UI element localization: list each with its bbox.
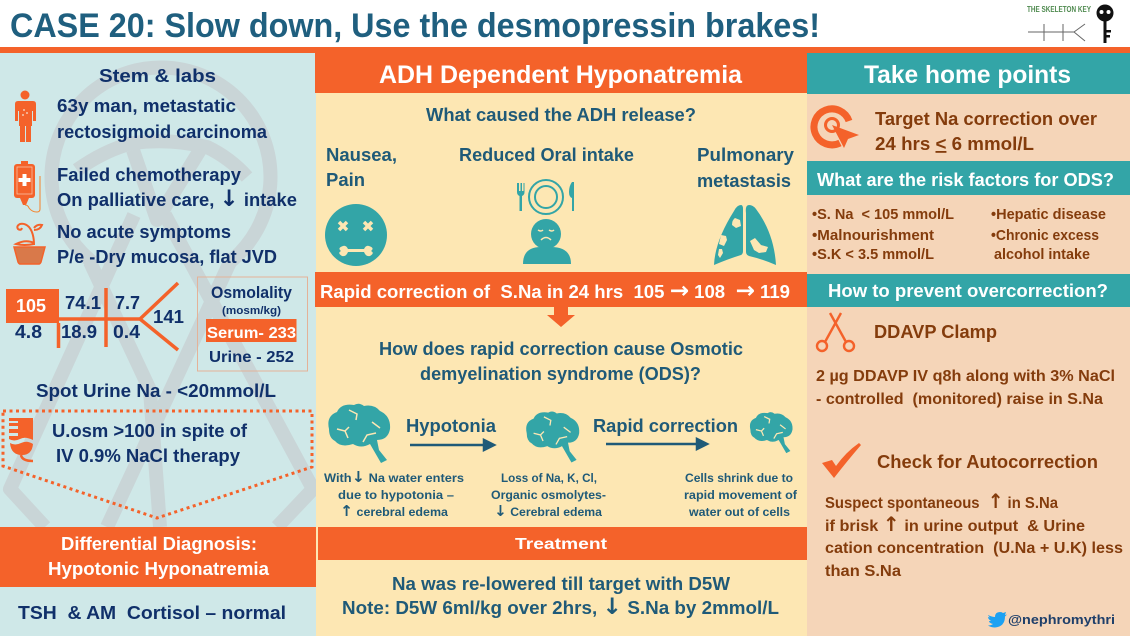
social handle: [988, 612, 1115, 628]
dotted callout: IV 0.9% NaCl therapy: [56, 446, 240, 466]
label: hypotonia: Hypotonia: [406, 416, 497, 436]
text: autocorrection: Suspect spontaneous ↑ in S.Na: [825, 489, 1058, 513]
icon: target: [814, 109, 859, 148]
panel: differential diagnosis: [0, 527, 318, 636]
text: autocorrection: [825, 489, 1123, 580]
caption: rapid correction stage: water out of cells: [688, 505, 790, 519]
icon: clamp: [817, 313, 854, 351]
text: target correction: Target Na correction over: [875, 109, 1097, 129]
icon: shrunken brain: [750, 412, 793, 453]
title: CASE 20: Slow down, Use the desmopressin brakes!: [10, 7, 820, 45]
caption: rapid correction stage: rapid movement of: [684, 488, 798, 502]
cause: nausea and pain: Nausea,: [326, 145, 397, 165]
fishbone labs: 18.9: [61, 322, 97, 342]
text: patient: rectosigmoid carcinoma: [57, 122, 268, 142]
cause: nausea and pain: Pain: [326, 170, 365, 190]
icon: check mark: [822, 443, 861, 478]
band: rapid correction: Rapid correction of S.Na in 24 hrs 105 → 108 → 119: [320, 278, 790, 304]
text: symptoms: P/e -Dry mucosa, flat JVD: [57, 247, 277, 267]
text: autocorrection: than S.Na: [825, 563, 901, 580]
caption: rapid correction stage: [684, 471, 798, 519]
cause: pulmonary metastasis: [697, 145, 794, 265]
text: chemotherapy: Failed chemotherapy: [57, 165, 241, 185]
text: DDAVP regimen: - controlled (monitored) raise in S.Na: [816, 391, 1103, 408]
text: autocorrection: cation concentration (U.Na + U.K) less: [825, 540, 1123, 557]
band: treatment: [318, 527, 807, 560]
list: risk factors left: [812, 206, 954, 263]
orange header rule: [0, 47, 1130, 53]
cause: pulmonary metastasis: Pulmonary: [697, 145, 794, 165]
fishbone labs: 74.1: [65, 293, 101, 313]
icon: patient body: [15, 90, 36, 142]
heading: autocorrection: Check for Autocorrection: [877, 452, 1098, 472]
text: patient: 63y man, metastatic: [57, 96, 236, 116]
list: risk factors right: [991, 206, 1106, 263]
fishbone labs: 4.8: [15, 322, 42, 342]
list: risk factors left: •Malnourishment: [812, 227, 934, 244]
icon: normalised brain: [526, 411, 579, 462]
fishbone labs: 141: [153, 307, 184, 327]
caption: hypotonia stage: With↓ Na water enters: [324, 468, 464, 486]
panel: differential diagnosis: TSH & AM Cortisol – normal: [18, 603, 286, 623]
icon: iv bag: [14, 161, 40, 212]
cause: pulmonary metastasis: metastasis: [697, 171, 791, 191]
heading: stem and labs: Stem & labs: [99, 66, 216, 86]
panel: take home points: Take home points: [864, 61, 1071, 89]
text: DDAVP regimen: 2 µg DDAVP IV q8h along with 3% NaCl: [816, 368, 1115, 385]
logo: the skeleton key: THE SKELETON KEY: [1027, 5, 1092, 14]
band: risk factors: [807, 161, 1130, 195]
list: risk factors right: •Hepatic disease: [991, 206, 1106, 223]
dotted callout: U.osm >100 in spite of: [52, 421, 248, 441]
fishbone labs: 0.4: [113, 322, 140, 342]
question: ODS: How does rapid correction cause Osmotic: [379, 339, 743, 359]
question: ODS: [379, 339, 743, 384]
text: target correction: 24 hrs < 6 mmol/L: [875, 134, 1034, 154]
band: risk factors: What are the risk factors for ODS?: [817, 170, 1114, 190]
cause: nausea and pain: [325, 145, 397, 266]
text: treatment: [342, 574, 779, 620]
logo: the skeleton key: [1027, 4, 1114, 43]
osmolality box: [198, 277, 308, 371]
fishbone labs: 105: [16, 296, 46, 316]
panel: ADH dependent hyponatremia: [315, 53, 807, 636]
panel: differential diagnosis: Hypotonic Hyponatremia: [48, 559, 270, 579]
question: ODS: demyelination syndrome (ODS)?: [420, 364, 701, 384]
text: spot urine sodium: Spot Urine Na - <20mmol/L: [36, 381, 276, 401]
text: DDAVP regimen: [816, 368, 1115, 408]
panel: differential diagnosis: Differential Diagnosis:: [61, 534, 257, 554]
dotted callout: [3, 411, 312, 518]
caption: adaptation stage: Organic osmolytes-: [491, 488, 606, 502]
text: target correction: [875, 109, 1097, 154]
heading band: [315, 53, 807, 93]
heading: DDAVP clamp: DDAVP Clamp: [874, 322, 997, 342]
icon: urine bag: [9, 418, 33, 461]
caption: adaptation stage: [491, 471, 606, 520]
osmolality box: Urine - 252: [209, 349, 294, 366]
panel: stem and labs: [0, 53, 316, 527]
cause: reduced oral intake: [459, 145, 634, 264]
icon: swollen brain: [328, 404, 390, 463]
list: risk factors right: alcohol intake: [994, 246, 1090, 263]
heading band: [807, 53, 1130, 94]
fishbone labs: [6, 283, 184, 350]
arrow: rapid correction: [606, 439, 707, 449]
text: patient: [57, 96, 268, 142]
label: rapid correction: Rapid correction: [593, 416, 738, 436]
osmolality box: (mosm/kg): [222, 305, 281, 317]
panel: ADH dependent hyponatremia: ADH Dependent Hyponatremia: [379, 61, 743, 89]
arrow: down: [547, 307, 575, 327]
list: risk factors left: •S.K < 3.5 mmol/L: [812, 246, 934, 263]
list: risk factors right: •Chronic excess: [991, 227, 1099, 244]
question: ADH release: What caused the ADH release?: [426, 105, 696, 125]
band: prevent overcorrection: How to prevent overcorrection?: [828, 281, 1108, 301]
panel: take home points: [807, 53, 1130, 636]
text: chemotherapy: On palliative care, ↓ intake: [57, 186, 297, 212]
text: chemotherapy: [57, 165, 297, 212]
cause: reduced oral intake: Reduced Oral intake: [459, 145, 634, 165]
band: treatment: Treatment: [515, 536, 608, 553]
icon: plant pot: [14, 224, 45, 264]
caption: hypotonia stage: due to hypotonia –: [338, 488, 454, 502]
arrow: hypotonia: [410, 440, 494, 450]
caption: adaptation stage: ↓ Cerebral edema: [494, 502, 602, 520]
caption: hypotonia stage: ↑ cerebral edema: [340, 502, 448, 520]
text: symptoms: [57, 222, 277, 267]
caption: adaptation stage: Loss of Na, K, Cl,: [501, 471, 597, 485]
text: treatment: Na was re-lowered till target with D5W: [392, 574, 730, 594]
text: symptoms: No acute symptoms: [57, 222, 231, 242]
osmolality box: Serum- 233: [207, 325, 296, 342]
fishbone labs: 7.7: [115, 293, 140, 313]
osmolality box: Osmolality: [211, 284, 293, 302]
list: risk factors left: •S. Na < 105 mmol/L: [812, 206, 954, 223]
watermark ribbon: [10, 67, 313, 527]
text: autocorrection: if brisk ↑ in urine output & Urine: [825, 512, 1085, 536]
caption: rapid correction stage: Cells shrink due to: [685, 471, 793, 485]
social handle: @nephromythri: [1008, 613, 1115, 627]
text: treatment: Note: D5W 6ml/kg over 2hrs, ↓ S.Na by 2mmol/L: [342, 594, 779, 620]
band: prevent overcorrection: [807, 274, 1130, 307]
caption: hypotonia stage: [324, 468, 464, 520]
